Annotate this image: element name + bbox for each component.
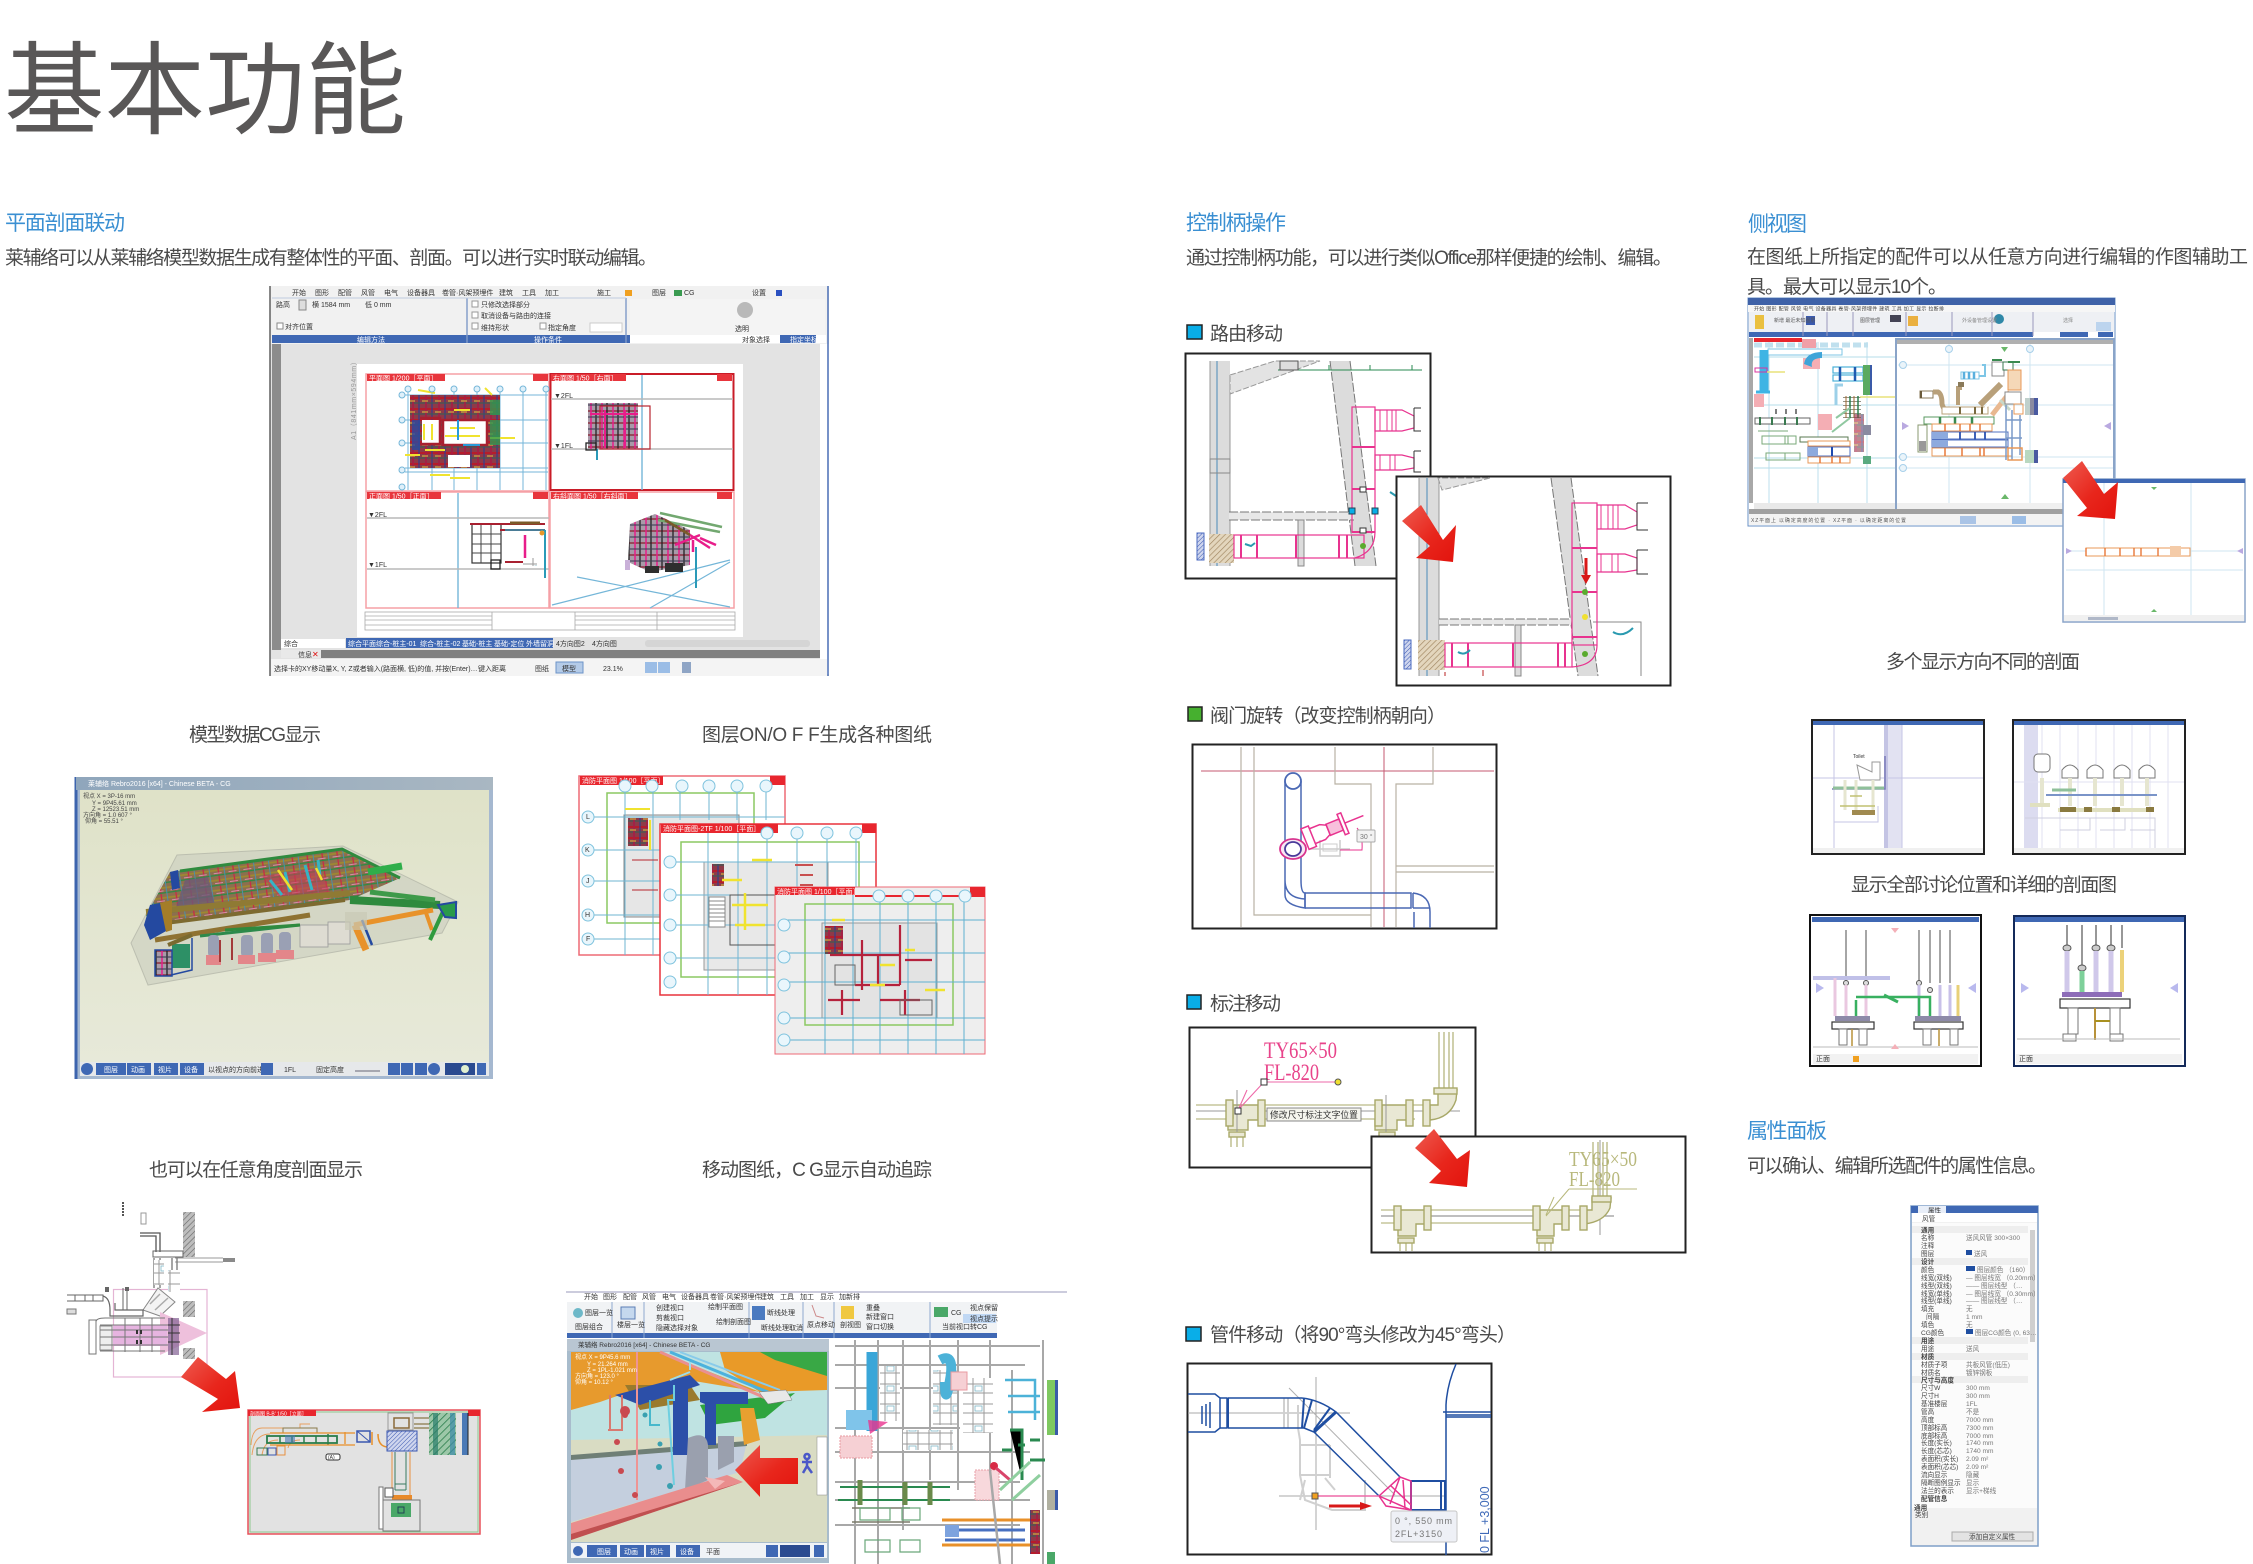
property rows: 7000 mm (1966, 1417, 1994, 1424)
sheet 2: 消防平面图-2TF 1/100［平面］ (663, 824, 760, 833)
panel: front view: 正面图 1/50［正面］ (369, 492, 434, 500)
property rows: 注释 (1921, 1241, 1935, 1250)
tooltip: 2FL+3150 (1395, 1529, 1442, 1539)
diagram: fitting move: 0 FL +3,000 (1478, 1486, 1492, 1553)
sheet tabs: 基础-桩主 (462, 639, 492, 648)
plan drawing (829, 1339, 1067, 1564)
property rows: 高度 (1921, 1415, 1935, 1424)
property rows: —— 图层线型 （… (1966, 1296, 2022, 1305)
CG toolbar: 图层 (597, 1548, 611, 1556)
sheet tabs: 综合-桩主-02 (420, 639, 461, 648)
status bar: 选择卡的XY移动量X, Y, Z或者输入(路面横, 低)的值, 并按(Enter)… (274, 664, 478, 673)
property rows: 2.09 m² (1966, 1456, 1989, 1463)
property rows: 线型(双线) (1921, 1281, 1952, 1290)
tooltip: 0 °, 550 mm (1395, 1516, 1452, 1526)
wall (571, 1442, 747, 1522)
label: valve rotation: 阀门旋转（改变控制柄朝向） (1210, 705, 1446, 727)
property rows: 长度(实长) (1921, 1438, 1952, 1447)
section window: risers one group (2014, 916, 2185, 1066)
property rows: 设计 (1921, 1257, 1935, 1266)
property rows: 2.09 m² (1966, 1464, 1989, 1471)
ribbon: 风管 (642, 1292, 656, 1301)
ribbon: 显示 (820, 1293, 834, 1301)
blue ducts and columns (615, 1375, 700, 1405)
sheet (350, 358, 743, 637)
readout: 仰角 = 10.12 ° (575, 1378, 614, 1386)
status bar: 23.1% (603, 666, 623, 673)
layered drawings (579, 776, 985, 1054)
property rows: 送风风管 300×300 (1966, 1233, 2020, 1242)
sheet tabs: 综合 (284, 639, 298, 648)
ribbon toolbar: 指定角度 (548, 323, 576, 332)
message bar: 信息 (298, 650, 312, 659)
description and button: 通用 (1914, 1503, 1927, 1512)
ribbon: 隐藏选择对象 (656, 1323, 698, 1332)
ribbon toolbar: 配管 (338, 288, 352, 297)
property rows: 通用 (1921, 1226, 1934, 1234)
ribbon toolbar: 卷管·风架预埋件 (442, 288, 493, 297)
property rows: 底部标高 (1921, 1431, 1948, 1440)
property rows: 图层颜色 （160） (1977, 1265, 2029, 1274)
property rows: 显示 (1966, 1479, 1980, 1487)
property rows: 颜色 (1921, 1265, 1935, 1274)
diagram: fitting move (1188, 1364, 1492, 1555)
property rows: 线型(单线) (1921, 1296, 1952, 1305)
diagram: route move before (1186, 354, 1430, 578)
window title bar (76, 777, 493, 790)
properties panel: 风管 (1922, 1214, 1936, 1223)
section: handle operations heading: 控制柄操作 (1186, 212, 1286, 235)
property rows: — 图层线宽 （0.30mm） (1966, 1289, 2040, 1298)
property rows: 1FL (1966, 1401, 1978, 1408)
ribbon toolbar: 建筑 (499, 288, 513, 297)
property rows: 隔断图例显示 (1921, 1478, 1961, 1487)
ribbon: 加工 (800, 1292, 814, 1301)
ribbon: 绘制剖面图 (716, 1317, 751, 1326)
CG tool bar: 设备 (184, 1065, 198, 1074)
section plan with cutting range (67, 1202, 235, 1377)
ribbon: 设备器具 (681, 1292, 709, 1301)
CG toolbar: 平面 (706, 1548, 720, 1556)
property rows: 7300 mm (1966, 1425, 1994, 1432)
ribbon toolbar: 工具 (522, 289, 536, 297)
status bar (271, 659, 827, 676)
panel: right view: ▼2FL (554, 393, 573, 400)
ribbon toolbar: 风管 (361, 288, 375, 297)
property rows: 长度(芯芯) (1921, 1446, 1952, 1455)
caption: drawing moves and CG follows: 移动图纸，C G显示自动追踪 (702, 1159, 932, 1181)
property rows: 尺寸H (1921, 1391, 1939, 1400)
property rows: 用途 (1921, 1344, 1935, 1353)
diagram: annotation move before: FL-820 (1264, 1060, 1319, 1085)
ribbon: 视点保留 (970, 1303, 998, 1312)
ribbon: 加新排 (839, 1292, 860, 1301)
ribbon: 视点提示 (970, 1314, 998, 1323)
result section panel: 剖面图 B-B′ 1/50［立面］ (250, 1410, 307, 1418)
title bar and ribbon: 外设备管理设置 (1962, 317, 1997, 324)
caption: model data CG display: 模型数据CG显示 (189, 724, 321, 746)
coordinates readout: 方向角 = 1.0 607 ° (83, 811, 133, 819)
property rows: —— 图层线型 （… (1966, 1281, 2022, 1290)
section: plan and section linkage heading: 平面剖面联动 (5, 212, 125, 235)
panel: right view: 右面图 1/50［右面］ (553, 374, 618, 382)
CG toolbar: 视片 (650, 1547, 664, 1556)
CG window title: 莱辅络 Rebro2016 [x64] - Chinese BETA - CG (578, 1340, 710, 1349)
caption: multiple sections: 多个显示方向不同的剖面 (1886, 651, 2080, 673)
screenshot: CG 3D model view (76, 777, 493, 1079)
section: side view description: 在图纸上所指定的配件可以从任意方向进行编辑的作图辅助工 (1747, 246, 2248, 268)
ribbon: 窗口切换 (866, 1322, 894, 1331)
coordinates readout: 仰角 = 55.51 ° (85, 817, 124, 825)
screenshot: drawing and CG linked view (566, 1291, 1067, 1564)
ribbon: 图层一览 (585, 1308, 613, 1317)
description and button (1914, 1503, 2033, 1541)
section window: risers two groups: 正面 (1816, 1055, 1830, 1063)
sheet 2 (660, 824, 876, 995)
property rows: 不是 (1966, 1408, 1980, 1416)
property rows: CG颜色 (1921, 1328, 1944, 1337)
title: 基本功能 (4, 36, 406, 148)
CG window title (567, 1339, 829, 1351)
panel: right view (550, 374, 734, 490)
sheet tabs: 4方向图2 (556, 639, 585, 648)
property rows (1912, 1226, 2040, 1503)
title bar and ribbon (1748, 298, 2115, 337)
readout: 视点 X = 9P45.6 mm (575, 1353, 630, 1361)
property rows: 7000 mm (1966, 1433, 1994, 1440)
property rows: 显示+梯线 (1966, 1486, 1997, 1495)
ribbon toolbar: 设备器具 (407, 288, 435, 297)
CG tool bar: 固定高度 (316, 1065, 344, 1074)
panel: plan view (366, 374, 549, 491)
screenshot: side view main window (1748, 298, 2115, 526)
ribbon toolbar: 电气 (384, 288, 398, 297)
property rows: 填充 (1921, 1304, 1935, 1313)
ribbon: CG (951, 1310, 962, 1317)
readout: 方向角 = 123.0 ° (575, 1372, 620, 1380)
ceiling (571, 1352, 760, 1410)
property rows: 间隔 (1926, 1312, 1940, 1321)
diagram: valve rotation (1192, 744, 1496, 928)
caption: arbitrary angle section display: 也可以在任意角度剖面显示 (149, 1159, 363, 1181)
sheet 1: F (586, 936, 590, 943)
icon: red arrow route move (1402, 505, 1456, 562)
title bar and ribbon: 新增 最近未知图层 (1774, 317, 1815, 324)
3D building model (131, 846, 458, 985)
ribbon toolbar: 路高 (276, 300, 290, 309)
property rows: 隐藏 (1966, 1470, 1980, 1479)
readout (575, 1353, 637, 1386)
coordinates readout (83, 792, 139, 825)
diagram: annotation move before: TY65×50 (1264, 1038, 1337, 1063)
property rows: 名称 (1921, 1233, 1935, 1242)
ribbon toolbar: 横 1584 mm (312, 300, 350, 309)
section: properties panel heading: 属性面板 (1747, 1120, 1827, 1143)
floor strip (571, 1475, 743, 1540)
CG toolbar: 设备 (680, 1547, 694, 1556)
property rows: 材质 (1921, 1352, 1935, 1361)
coordinates readout: 视点 X = 3P-16 mm (83, 792, 135, 800)
ribbon toolbar: 设置 (752, 288, 766, 297)
sheet tabs: 综合平面 (348, 639, 376, 648)
ribbon toolbar: 低 0 mm (365, 300, 392, 309)
property rows: 表面积(芯芯) (1921, 1462, 1958, 1471)
ribbon: 断线处理 (767, 1308, 795, 1317)
ribbon (566, 1291, 1067, 1338)
ribbon toolbar: 施工 (597, 288, 611, 297)
CG toolbar (571, 1543, 827, 1558)
section window: toilet: Toilet (1853, 754, 1865, 760)
left drawing (1749, 337, 1896, 509)
diagram: valve rotation: 30 ° (1360, 833, 1373, 841)
ribbon toolbar: 指定坐标 (790, 335, 818, 344)
ribbon toolbar (270, 286, 829, 344)
tooltip (1391, 1511, 1457, 1542)
section window: risers one group: 正面 (2019, 1055, 2033, 1063)
diagram: route move after (1396, 476, 1670, 686)
icon: red arrow annotation move (1415, 1129, 1470, 1187)
gray equipment (685, 1435, 734, 1490)
title bar and ribbon: 选择 (2063, 317, 2073, 324)
window title bar: 莱辅络 Rebro2016 [x64] - Chinese BETA - CG (88, 779, 231, 788)
ribbon: 楼层一览 (617, 1320, 645, 1329)
label: fitting move: 管件移动（将90°弯头修改为45°弯头） (1210, 1324, 1516, 1346)
ribbon: 重叠 (866, 1304, 880, 1312)
icon: red arrow side view (2063, 461, 2118, 519)
message bar (281, 650, 820, 659)
property rows: 法兰的表示 (1921, 1486, 1954, 1495)
sheet 1 (579, 776, 785, 955)
readout: Y = 21.264 mm (587, 1362, 628, 1368)
ribbon toolbar: 只修改选择部分 (481, 300, 530, 309)
properties panel: 属性 (1928, 1206, 1942, 1214)
ribbon: 工具 (780, 1293, 794, 1301)
property rows: 300 mm (1966, 1385, 1990, 1392)
panel: front view: ▼2FL (368, 512, 387, 519)
panel: plan view: 平面图 1/200［平面］ (369, 374, 437, 382)
icon: red arrow down-right (181, 1357, 240, 1412)
property rows: 共板风管(低压) (1966, 1360, 2010, 1369)
ribbon: 断线处理取消 (761, 1323, 803, 1332)
panel: isometric view: 右斜面图 1/50［右斜面］ (553, 492, 632, 500)
property rows: 图层 (1921, 1250, 1935, 1258)
ribbon: 原点移动 (807, 1320, 835, 1329)
screenshot: side view main window: XZ平面上 以确定高度的位置 · XZ平面 · 以确定距离的位置 (1751, 517, 1906, 524)
panel: front view: ▼1FL (368, 562, 387, 569)
diagram: annotation move after (1372, 1136, 1686, 1252)
property rows: 表面积(实长) (1921, 1454, 1958, 1463)
pipes (608, 1352, 780, 1500)
ribbon toolbar: CG (684, 290, 694, 297)
ribbon: 开始 (584, 1292, 598, 1301)
property rows: 300 mm (1966, 1393, 1990, 1400)
title bar and ribbon: 开始 图形 配管 风管 电气 设备器具 卷管·风架预埋件 建筑 工具 加工 显示 拉断排 (1754, 306, 1944, 312)
panel: right view: ▼1FL (554, 443, 573, 450)
icon: person (802, 1454, 812, 1473)
title bar and ribbon: 图层管理 (1860, 317, 1880, 324)
property rows: 送风 (1966, 1344, 1980, 1353)
status bar: 键入距离 (478, 664, 506, 673)
property rows: 填色 (1921, 1320, 1935, 1329)
ribbon toolbar: 图形 (315, 289, 329, 297)
coordinates readout: Y = 9P45.61 mm (92, 801, 137, 807)
sheet tabs: 综合-桩主-01 (376, 639, 417, 648)
sheet 3: 消防平面图 1/100［平面］ (777, 887, 859, 896)
property rows: 1 mm (1966, 1314, 1983, 1321)
ribbon: 剖视图 (840, 1320, 861, 1329)
sheet 1: K (585, 847, 590, 854)
label: annotation move: 标注移动 (1210, 993, 1281, 1015)
ribbon toolbar: 图层 (652, 289, 666, 297)
sheet tabs (281, 638, 810, 648)
diagram: annotation move before (1190, 1028, 1476, 1168)
property rows: 无 (1966, 1305, 1973, 1313)
icon: red arrow left (735, 1445, 798, 1497)
property rows: 无 (1966, 1321, 1973, 1329)
property rows: 配管信息 (1921, 1494, 1948, 1503)
property rows: 1740 mm (1966, 1448, 1994, 1455)
property rows: 镀锌钢板 (1966, 1368, 1993, 1377)
ribbon: 建筑 (760, 1292, 774, 1301)
section: plan and section linkage description: 莱辅络可以从莱辅络模型数据生成有整体性的平面、剖面。可以进行实时联动编辑。 (5, 247, 657, 269)
property rows: 材质名 (1921, 1368, 1941, 1377)
sheet tabs: 外墙留洞 (526, 639, 554, 648)
properties panel (1911, 1206, 2040, 1546)
diagram: annotation move after: TY65×50 (1569, 1147, 1637, 1171)
sheet 1: 消防平面图 1/100［平面］ (582, 776, 664, 785)
right drawing (1896, 339, 2114, 510)
property rows: 图层CG颜色 (0, 63… (1975, 1328, 2037, 1337)
ribbon toolbar: 操作条件 (534, 335, 562, 344)
result section panel: (A) (328, 1455, 335, 1461)
ribbon toolbar: 编辑方法 (357, 335, 385, 344)
CG toolbar: 动画 (624, 1547, 638, 1556)
screenshot: side view popup window (2063, 479, 2245, 622)
sheet 3 (775, 887, 985, 1054)
panel: isometric view (550, 492, 734, 608)
CG view window (567, 1339, 829, 1563)
section: properties panel description: 可以确认、编辑所选配件的属性信息。 (1747, 1155, 2047, 1177)
property rows: — 图层线宽 （0.20mm） (1966, 1273, 2040, 1282)
ribbon toolbar: 维持形状 (481, 323, 509, 332)
panel: front view (366, 492, 549, 608)
ribbon: 绘制平面图 (708, 1302, 743, 1311)
ribbon toolbar: 开始 (292, 288, 306, 297)
section window: toilet (1812, 720, 1984, 854)
CG tool bar: 以视点的方向前进中 (208, 1065, 271, 1074)
section: handle operations description: 通过控制柄功能，可以进行类似Office那样便捷的绘制、编辑。 (1186, 247, 1672, 269)
status bar: 图纸 (535, 664, 549, 673)
screenshot: four-view drawing window (270, 286, 829, 676)
CG tool bar: 图层 (104, 1066, 118, 1074)
ribbon toolbar: 选明 (735, 324, 749, 333)
property rows: 1740 mm (1966, 1440, 1994, 1447)
sheet tabs: 4方向图 (592, 639, 617, 648)
property rows: 用途 (1921, 1336, 1935, 1345)
section window: risers two groups (1810, 915, 1981, 1066)
CG tool bar (80, 1062, 489, 1076)
sheet: A1（841mm×594mm） (350, 358, 358, 440)
section window: four toilets (2013, 720, 2185, 854)
property rows: 线宽(双线) (1921, 1273, 1952, 1282)
description and button: 添加自定义属性 (1969, 1532, 2016, 1541)
section: side view heading: 侧视图 (1748, 213, 1807, 236)
property rows: 顶部标高 (1921, 1423, 1948, 1432)
CG tool bar: 视片 (158, 1065, 172, 1074)
ribbon: 创建视口 (656, 1303, 684, 1312)
result section panel (248, 1410, 480, 1534)
diagram: annotation move after: FL-820 (1569, 1167, 1620, 1191)
label: route move: 路由移动 (1210, 323, 1283, 345)
caption: all positions and detailed section: 显示全部讨论位置和详细的剖面图 (1851, 874, 2117, 896)
title block (365, 612, 735, 630)
property rows: 材质子项 (1921, 1360, 1948, 1369)
section: side view description: 具。最大可以显示10个。 (1747, 276, 1947, 298)
property rows: 管高 (1921, 1407, 1935, 1416)
ribbon: 配管 (623, 1292, 637, 1301)
description and button: 类别 (1915, 1510, 1929, 1519)
property rows: 流向显示 (1921, 1470, 1948, 1479)
CG tool bar: 动画 (131, 1065, 145, 1074)
section: side view description (1747, 246, 2248, 298)
property rows: 基准楼层 (1921, 1399, 1948, 1408)
diagram: annotation move before: 修改尺寸标注文字位置 (1270, 1109, 1358, 1120)
ribbon toolbar: 对齐位置 (285, 322, 313, 331)
sheet 1: J (586, 878, 590, 885)
status bar: 模型 (562, 664, 576, 673)
property rows: 尺寸W (1921, 1383, 1941, 1392)
ribbon toolbar: 对象选择 (742, 335, 770, 344)
ribbon: 图层组合 (575, 1322, 603, 1331)
message bar: ✕ (312, 650, 319, 659)
CG tool bar: 1FL (284, 1067, 296, 1074)
ribbon: 电气 (662, 1292, 676, 1301)
ribbon toolbar: 加工 (545, 288, 559, 297)
sheet tabs: 基础-定位 (494, 639, 524, 648)
readout: Z = 1PL-1.021 mm (587, 1368, 637, 1374)
property rows: 尺寸与高度 (1921, 1376, 1954, 1384)
property rows: 送风 (1974, 1249, 1988, 1258)
property rows: 线宽(单线) (1921, 1289, 1952, 1298)
ribbon: 卷管·风架预埋件 (710, 1292, 761, 1301)
sheet 1: H (585, 912, 590, 919)
ribbon: 新建窗口 (866, 1312, 894, 1321)
sheet 1: L (586, 814, 590, 821)
ribbon: 当前视口转CG (942, 1322, 988, 1331)
ribbon: 图形 (603, 1293, 617, 1301)
ribbon: 剪裁视口 (656, 1313, 684, 1322)
caption: layer on/off drawings: 图层ON/O F F生成各种图纸 (702, 724, 932, 746)
ribbon toolbar: 取消设备与路由的连接 (481, 311, 551, 320)
coordinates readout: Z = 12523.51 mm (92, 807, 139, 813)
